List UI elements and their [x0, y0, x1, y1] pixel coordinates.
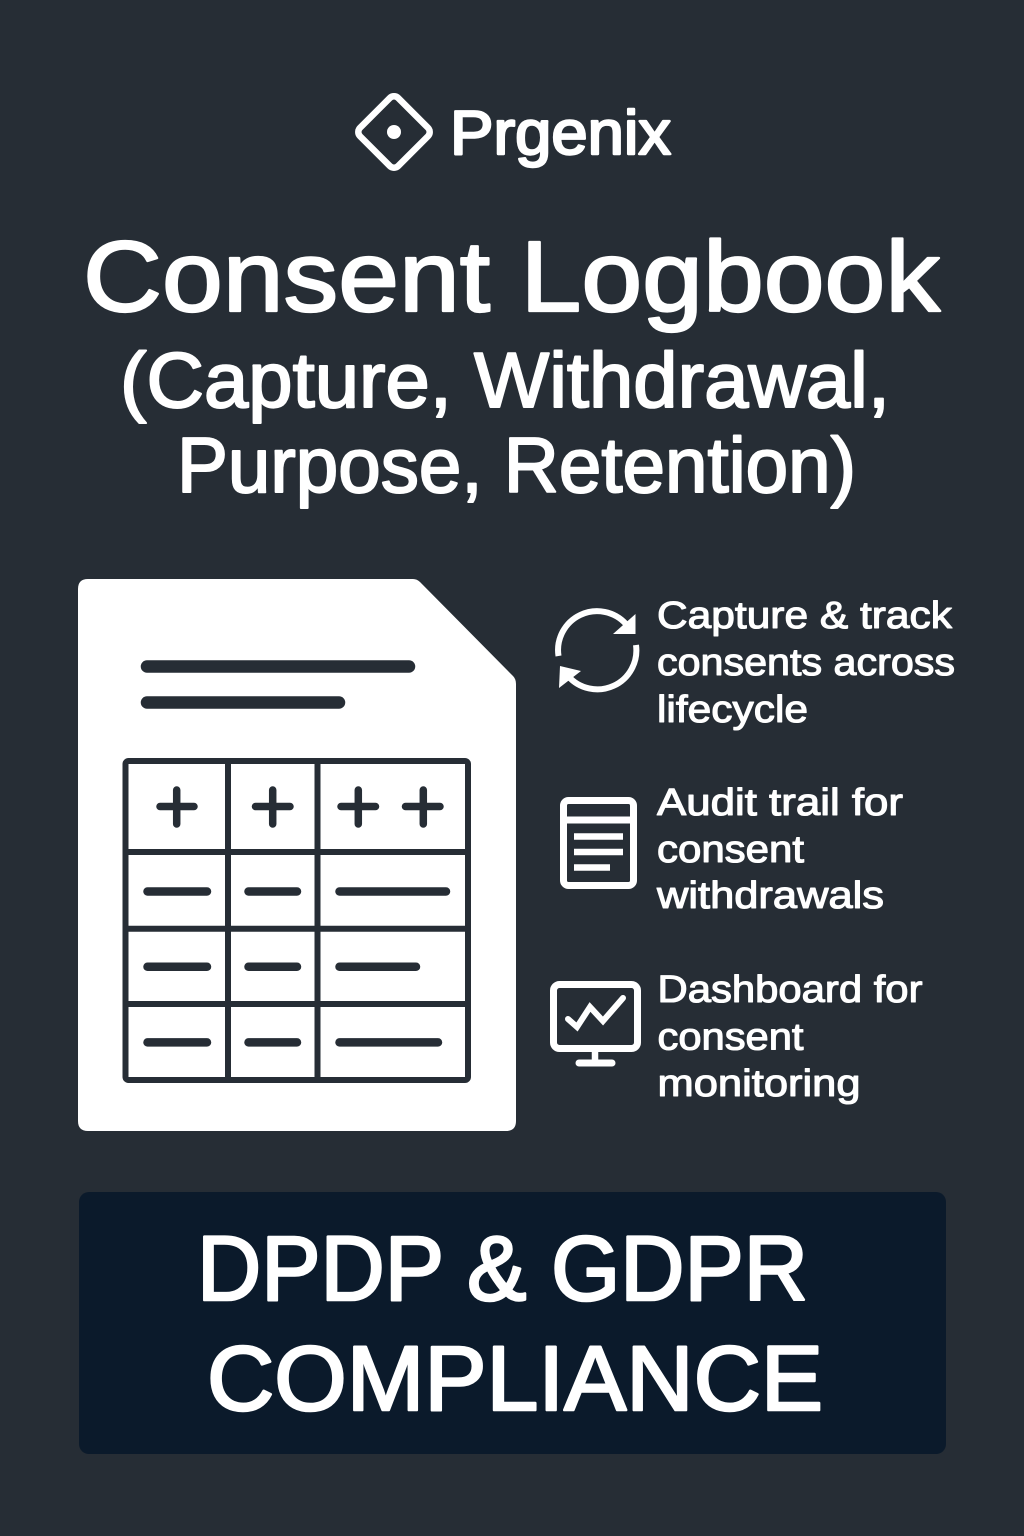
document heading lines: [147, 666, 409, 702]
icon: monitor with chart: [554, 984, 638, 1063]
subtitle: (Capture, Withdrawal,: [120, 336, 890, 424]
header row plus signs: [160, 790, 440, 824]
subtitle: [120, 336, 890, 509]
banner text: DPDP & GDPR: [197, 1218, 808, 1320]
icon: diamond logo mark: [356, 94, 432, 170]
feature text: Capture & track: [657, 595, 953, 637]
feature text: consents across: [657, 642, 955, 684]
logo: [356, 94, 671, 170]
consent table: [126, 761, 468, 1080]
feature text: [656, 782, 903, 917]
banner background: [79, 1192, 946, 1454]
banner: compliance: [79, 1192, 946, 1454]
feature text: withdrawals: [656, 875, 884, 917]
feature text: Dashboard for: [658, 969, 923, 1011]
feature: dashboard: [554, 969, 923, 1105]
banner text: [197, 1218, 823, 1430]
subtitle: Purpose, Retention): [177, 421, 856, 509]
table row dashes: [148, 892, 446, 1042]
icon: audit document: [564, 800, 634, 886]
table grid: [126, 761, 468, 1080]
panel: logbook document illustration: [78, 579, 516, 1131]
icon: sync arrows: [558, 611, 636, 689]
feature text: monitoring: [658, 1063, 860, 1105]
feature text: Audit trail for: [657, 782, 903, 824]
feature text: lifecycle: [657, 689, 808, 731]
title: Consent Logbook: [83, 221, 941, 333]
feature text: [658, 969, 923, 1105]
banner text: COMPLIANCE: [207, 1328, 823, 1430]
feature text: consent: [657, 829, 804, 871]
feature text: consent: [658, 1016, 804, 1058]
feature: audit trail: [564, 782, 903, 917]
brand name: Prgenix: [450, 99, 671, 168]
document sheet: [78, 579, 516, 1131]
feature text: [657, 595, 955, 731]
feature: capture and track: [558, 595, 955, 731]
